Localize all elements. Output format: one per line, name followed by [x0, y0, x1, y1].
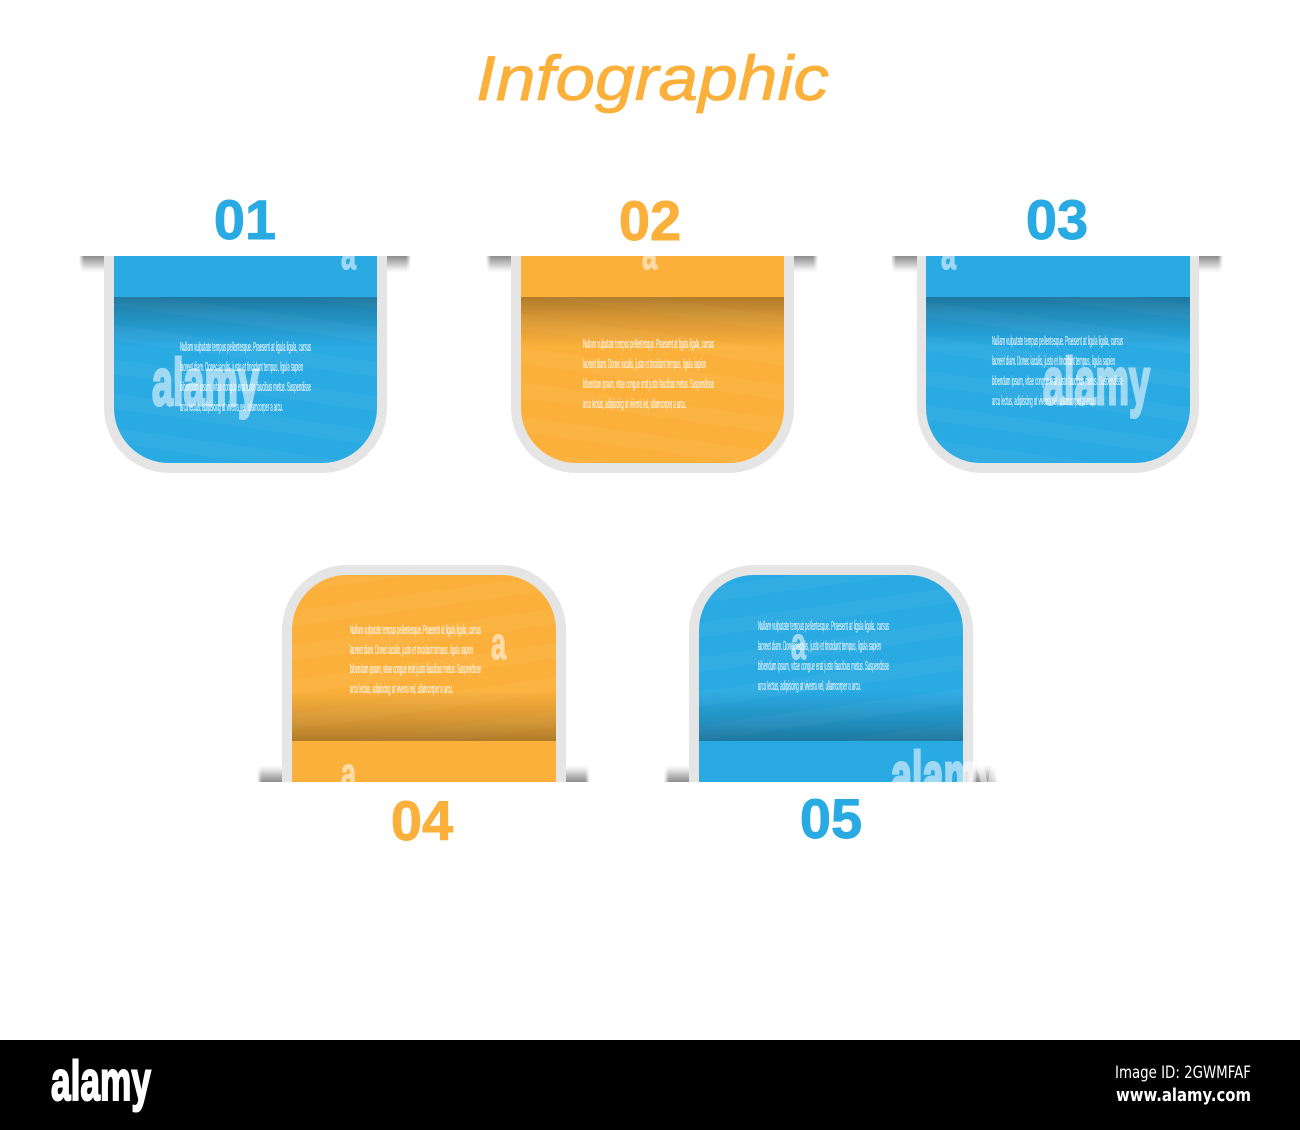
shadow tabs — [664, 765, 997, 782]
panel: 04: arcu lectus, adipiscing at viverra vel, ullamcorper a arcu. — [350, 681, 453, 696]
striped upper area — [699, 575, 963, 741]
footer background — [0, 1040, 1300, 1130]
panel: 05: Nullam vulputate tempus pellentesque. Praesent at ligula ligula, cursus — [758, 618, 889, 633]
number 01: 01 — [214, 188, 276, 251]
grey frame — [689, 565, 973, 782]
grey frame — [282, 565, 566, 782]
panel: 05 — [664, 565, 998, 850]
band shadow — [521, 297, 784, 347]
number 04: 04 — [391, 789, 453, 852]
watermark letter: a — [341, 748, 357, 799]
panel: 01 — [79, 188, 411, 473]
striped lower area — [114, 297, 377, 463]
footer bar — [0, 1040, 1300, 1130]
watermark letter: a — [941, 228, 957, 279]
body text — [180, 339, 311, 414]
grey frame — [917, 256, 1199, 473]
title: Infographic — [476, 44, 829, 114]
number 03: 03 — [1026, 188, 1088, 251]
band shadow — [926, 297, 1190, 347]
card body — [926, 256, 1190, 463]
striped lower area — [926, 297, 1190, 463]
number 02: 02 — [619, 189, 681, 252]
shadow tabs — [79, 256, 411, 273]
card body — [292, 575, 556, 782]
panel: 04: Nullam vulputate tempus pellentesque. Praesent at ligula ligula, cursus — [350, 622, 481, 637]
shadow tabs — [891, 256, 1223, 273]
watermark: alamy — [152, 345, 259, 419]
watermark letter: a — [791, 618, 807, 669]
panel: 04: laoreet diam. Donec iaculis, justo et tincidunt tempus, ligula sapien — [350, 642, 473, 657]
shadow tabs — [257, 765, 590, 782]
striped upper area — [292, 575, 556, 741]
band shadow — [699, 691, 963, 741]
panel: 04: bibendum ipsum, vitae congue erat justo faucibus metus. Suspendisse — [350, 661, 481, 676]
watermark letter: a — [341, 228, 357, 279]
body text — [992, 333, 1123, 408]
panel: 01: bibendum ipsum, vitae congue erat justo faucibus metus. Suspendisse — [180, 379, 311, 394]
website: www.alamy.com — [1116, 1085, 1251, 1106]
watermark letter: a — [491, 618, 507, 669]
image id: Image ID: 2GWMFAF — [1115, 1063, 1251, 1083]
body text — [583, 336, 714, 411]
shadow tabs — [486, 256, 818, 273]
striped lower area — [521, 297, 784, 463]
panel: 01: arcu lectus, adipiscing at viverra vel, ullamcorper a arcu. — [180, 399, 283, 414]
card body — [521, 256, 784, 463]
panel: 01: laoreet diam. Donec iaculis, justo et tincidunt tempus, ligula sapien — [180, 359, 303, 374]
panel: 05: bibendum ipsum, vitae congue erat justo faucibus metus. Suspendisse — [758, 658, 889, 673]
card body — [699, 575, 963, 782]
panel: 05: arcu lectus, adipiscing at viverra vel, ullamcorper a arcu. — [758, 678, 861, 693]
body text — [350, 622, 481, 696]
watermark clipped: alamy — [891, 738, 998, 812]
panel: 01: Nullam vulputate tempus pellentesque. Praesent at ligula ligula, cursus — [180, 339, 311, 354]
number 05: 05 — [800, 787, 862, 850]
watermark letter: a — [642, 228, 658, 279]
panel: 02: Nullam vulputate tempus pellentesque. Praesent at ligula ligula, cursus — [583, 336, 714, 351]
panel: 05: laoreet diam. Donec iaculis, justo et tincidunt tempus, ligula sapien — [758, 638, 881, 653]
panel: 03 — [891, 188, 1223, 473]
body text — [758, 618, 889, 693]
band shadow — [292, 691, 556, 741]
panel: 02: bibendum ipsum, vitae congue erat justo faucibus metus. Suspendisse — [583, 376, 714, 391]
band shadow — [114, 297, 377, 347]
card body — [114, 256, 377, 463]
watermark: alamy — [1043, 344, 1150, 418]
panel: 02: laoreet diam. Donec iaculis, justo et tincidunt tempus, ligula sapien — [583, 356, 706, 371]
footer logo: alamy — [51, 1049, 151, 1112]
grey frame — [104, 256, 387, 473]
panel: 04 — [257, 565, 590, 852]
grey frame — [511, 256, 794, 473]
panel: 02 — [486, 189, 818, 473]
panel: 02: arcu lectus, adipiscing at viverra vel, ullamcorper a arcu. — [583, 396, 686, 411]
